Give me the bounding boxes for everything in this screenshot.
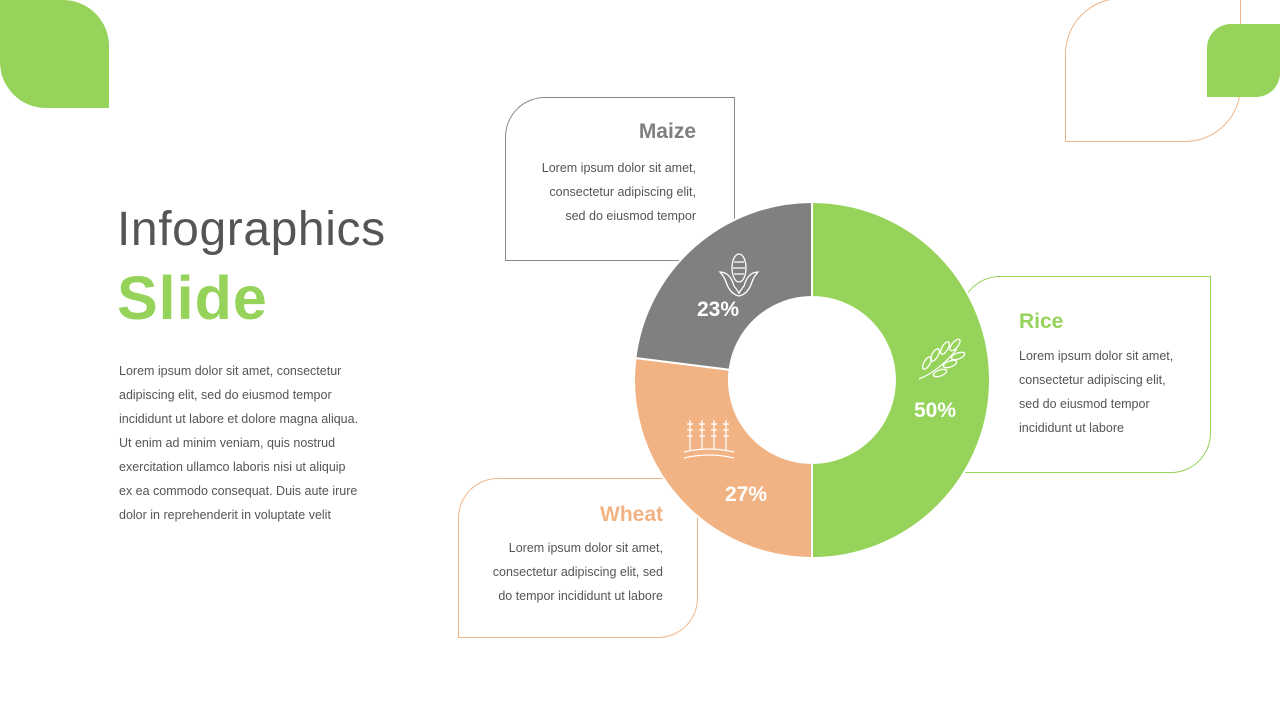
text: wheat (493, 541, 663, 603)
text: rice: sed do eiusmod tempor (1019, 397, 1150, 411)
panel: maize (505, 97, 735, 261)
intro text (119, 364, 358, 522)
text: maize: consectetur adipiscing elit, (549, 185, 696, 199)
decoration: top-left green leaf (0, 0, 109, 108)
decoration: top-right green leaf (1207, 24, 1280, 97)
intro text: Ut enim ad minim veniam, quis nostrud (119, 436, 335, 450)
panel: wheat (458, 478, 698, 638)
panel: rice (960, 276, 1211, 473)
text: wheat: do tempor incididunt ut labore (498, 589, 663, 603)
segment: wheat 27% (634, 358, 812, 558)
text: rice: incididunt ut labore (1019, 421, 1124, 435)
text: maize: sed do eiusmod tempor (565, 209, 696, 223)
text: rice (1019, 349, 1173, 435)
intro text: ex ea commodo consequat. Duis aute irure (119, 484, 357, 498)
intro text: dolor in reprehenderit in voluptate velit (119, 508, 331, 522)
intro text: Lorem ipsum dolor sit amet, consectetur (119, 364, 341, 378)
segment: rice 50% (812, 202, 990, 558)
label: 27%: 27% (725, 483, 767, 506)
title: Infographics (117, 203, 386, 256)
heading: wheat: Wheat (600, 503, 663, 526)
decoration: top-right outline leaf (1065, 0, 1241, 142)
subtitle: Slide (117, 264, 268, 332)
intro text: adipiscing elit, sed do eiusmod tempor (119, 388, 332, 402)
text: maize: Lorem ipsum dolor sit amet, (542, 161, 696, 175)
heading: rice: Rice (1019, 310, 1063, 333)
text: wheat: consectetur adipiscing elit, sed (493, 565, 663, 579)
intro text: incididunt ut labore et dolore magna aliqua. (119, 412, 358, 426)
icon: corn (720, 254, 758, 296)
text: rice: Lorem ipsum dolor sit amet, (1019, 349, 1173, 363)
text: wheat: Lorem ipsum dolor sit amet, (509, 541, 663, 555)
icon: rice leaves (919, 338, 966, 379)
segment: maize 23% (635, 202, 812, 370)
intro text: exercitation ullamco laboris nisi ut aliquip (119, 460, 346, 474)
icon: wheat (684, 420, 734, 458)
heading: maize: Maize (639, 120, 696, 143)
text: maize (542, 161, 696, 223)
label: 23%: 23% (697, 298, 739, 321)
label: 50%: 50% (914, 399, 956, 422)
text: rice: consectetur adipiscing elit, (1019, 373, 1166, 387)
